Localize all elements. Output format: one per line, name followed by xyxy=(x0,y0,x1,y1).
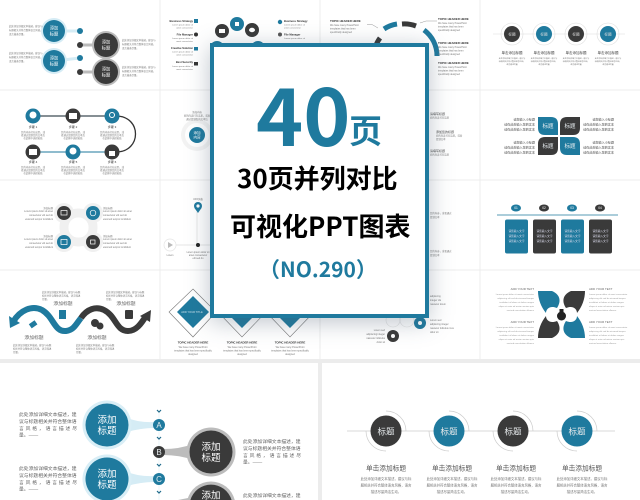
panel: slide 9 donut chart: specifically designed xyxy=(438,73,461,76)
panel: slide 8 diamonds xyxy=(169,289,314,356)
panel: slide 2 step flow: 步骤 1 xyxy=(29,124,38,129)
panel: partial text snippets beside card: nascetur lorem xyxy=(430,303,446,306)
panel: partial text snippets beside card: nascetur ridiculus xyxy=(366,337,386,340)
panel: slide 8 diamonds: designed xyxy=(237,353,248,356)
panel: bottom right slide: 描述尽量简洁生动。 xyxy=(437,489,467,494)
panel: slide 10 four circle titles small: 单击添加标题 xyxy=(502,50,523,55)
panel: slide 12 timeline cards: 请您输入文字 xyxy=(564,239,581,243)
panel: slide 2 step flow: 在此框中选择粘贴 xyxy=(63,136,83,140)
panel: slide 10 four circle titles small: 标题 xyxy=(572,32,580,36)
panel: slide 12 timeline cards: 请您输入文字 xyxy=(508,229,525,233)
panel: slide 5 icon list: amet consectetur xyxy=(176,26,193,30)
panel: bottom right slide: 题相关并符合整体语言风格，语言 xyxy=(557,482,608,488)
panel: slide 7 pin timeline xyxy=(164,197,210,260)
panel: slide 13 clover icon: Lorem ipsum dolor sit amet consectetur xyxy=(496,293,534,296)
panel: slide 10 four circle titles small: 语言描述尽量 xyxy=(538,62,550,66)
panel: slide 5 icon list: File Manager xyxy=(177,32,193,36)
panel: slide 13 clover icon: nostrud exercitation ullamco xyxy=(589,342,617,345)
panel: partial text snippets beside card: 复制文本 xyxy=(436,137,446,141)
panel: slide 1 timeline bubbles: 添加 xyxy=(50,24,58,32)
panel: slide 5 icon list: Lorem ipsum dolor sit xyxy=(172,37,193,40)
panel: slide 10 four circle titles small: 此处添加详细文本描述，建议与 xyxy=(531,56,557,60)
panel: slide 9 donut chart: We have many PowerPoint xyxy=(330,24,359,27)
panel: slide 7 pin timeline: Lorem xyxy=(167,254,173,257)
panel: slide 7 pin timeline: amet consectetur xyxy=(189,254,207,257)
panel: bottom left slide: 此处添加详细文本描述，建 xyxy=(19,411,77,418)
panel: slide 5 icon list: amet consectetur xyxy=(176,54,193,56)
panel: slide 8 diamonds: TOPIC HEADER HERE xyxy=(275,340,305,344)
panel: partial text snippets beside card: 您的内容打在这里 xyxy=(430,152,450,156)
series number: （NO.290） xyxy=(259,254,377,284)
panel: slide 9 donut chart: templates that has been xyxy=(438,50,464,52)
panel: slide 3 four circles: consectetur elit sed do xyxy=(103,214,128,217)
panel: slide 5 icon list: Lorem ipsum dolor sit xyxy=(172,50,193,54)
panel: slide 11 four petals: 标题 xyxy=(564,122,576,130)
panel: bottom left slide: 量。—— xyxy=(19,432,38,438)
panel: slide 9 donut chart: We have many PowerPoint xyxy=(438,66,467,69)
subtitle line 2: 可视化PPT图表 xyxy=(230,207,410,244)
panel: slide 8 diamonds: We have many PowerPoint xyxy=(228,346,257,349)
panel: partial text snippets beside card: Lorem sed xyxy=(430,319,442,322)
panel: slide 13 clover icon: nostrud exercitation ullamco xyxy=(507,309,535,312)
panel: slide 11 four petals xyxy=(504,116,614,155)
panel: bottom right slide: 题相关并符合整体语言风格，语言 xyxy=(427,482,478,488)
panel: bottom left slide: 议与标题相关并符合整体语 xyxy=(243,445,301,452)
panel: partial text snippets beside card: 您的内容，或者通过 xyxy=(430,249,452,253)
panel: slide 12 timeline cards: 请您输入文字 xyxy=(564,229,581,233)
panel: slide 9 donut chart: templates that has been xyxy=(330,28,356,30)
panel: partial text snippets beside card: dolor sit xyxy=(430,331,439,334)
panel: slide 13 clover icon: aliqua ut enim ad minim veniam quis xyxy=(499,338,535,341)
panel: slide 4 wave arrow: 尽量。 xyxy=(42,297,49,301)
panel: slide 4 wave arrow: 添加标题 xyxy=(24,334,44,341)
panel: bottom right slide xyxy=(322,363,640,500)
panel: slide 4 wave arrow: 尽量。 xyxy=(76,350,83,354)
panel: slide 2 step flow: 者通过复制您的文本后 xyxy=(61,133,86,137)
panel: slide 3 four circles: 添加标题 xyxy=(43,234,54,238)
panel: bottom left slide: 添加 xyxy=(97,415,117,426)
panel: bottom right slide: 单击添加标题 xyxy=(432,464,472,472)
panel: slide 1 timeline bubbles: 标题 xyxy=(50,30,59,38)
panel: bottom left slide: 言风格，语言描述尽 xyxy=(19,425,77,432)
panel: slide 2 step flow: 在此框中选择粘贴 xyxy=(102,136,122,140)
panel: slide 4 wave arrow: 相关并符合整体语言风格，语言描述 xyxy=(13,346,52,350)
panel: slide 10 four circle titles small: 标题相关并符合整体语言风格， xyxy=(531,59,557,63)
panel: slide 4 wave arrow: 尽量。 xyxy=(106,297,113,301)
unit 页: 页 xyxy=(349,105,382,153)
panel: bottom left slide: 言风格，语言描述尽 xyxy=(19,479,77,486)
panel: slide 10 four circle titles small: 标题相关并符合整体语言风格， xyxy=(499,59,525,63)
panel: slide 2 step flow: 步骤 5 xyxy=(69,159,78,164)
panel: slide 8 diamonds: We have many PowerPoint xyxy=(179,346,208,349)
panel: slide 4 wave arrow: 尽量。 xyxy=(13,350,20,354)
panel: slide 13 clover icon: nostrud exercitation ullamco xyxy=(589,309,617,312)
panel: slide 12 timeline cards: 请您输入文字 xyxy=(564,234,581,238)
panel: slide 9 donut chart: TOPIC HEADER HERE xyxy=(438,61,469,65)
panel: slide 3 four circles: eiusmod tempor incididunt xyxy=(103,246,131,249)
panel: bottom right slide: 描述尽量简洁生动。 xyxy=(501,489,531,494)
panel: slide 13 clover icon: incididunt ut labore et dolore magna xyxy=(589,301,625,304)
panel: slide 12 timeline cards: 01 xyxy=(514,206,518,210)
panel: slide 11 four petals: 请在此处输入您的文本 xyxy=(504,126,535,132)
panel: bottom left slide: 此处添加详细文本描述，建 xyxy=(243,492,301,499)
panel: slide 12 timeline cards: 04 xyxy=(598,206,602,210)
panel: slide 10 four circle titles small: 标题 xyxy=(604,32,612,36)
panel: slide 12 timeline cards: 请您输入文字 xyxy=(592,234,609,238)
panel: slide 2 step flow: 您的内容打在这里，或 xyxy=(61,130,86,134)
panel: slide 9 donut chart: TOPIC HEADER HERE xyxy=(330,19,361,23)
panel: slide 9 donut chart: TOPIC HEADER HERE xyxy=(438,17,469,21)
panel: slide 2 step flow: 者通过复制您的文本后 xyxy=(100,168,125,172)
panel: partial text snippets beside card: 请填写标题 xyxy=(430,148,445,153)
panel: slide 3 four circles: Lorem ipsum dolor sit amet xyxy=(24,210,53,213)
panel: slide 12 timeline cards: 请您输入文字 xyxy=(536,229,553,233)
panel: slide 1 timeline bubbles xyxy=(9,18,156,86)
panel: slide 4 wave arrow: 此处添加详细文本描述，建议与标题 xyxy=(76,343,115,347)
panel: slide 12 timeline cards: 02 xyxy=(542,206,546,210)
panel: slide 2 step flow: 步骤 2 xyxy=(69,124,78,129)
panel: slide 5 icon list: Lorem ipsum dolor sit xyxy=(284,37,305,40)
panel: bottom left slide: 此处添加详细文本描述，建 xyxy=(19,465,77,472)
panel: slide 2 step flow: 步骤 6 xyxy=(108,159,117,164)
panel: slide 5 icon list: Lorem ipsum dolor sit xyxy=(284,24,305,26)
panel: bottom right slide: 标题 xyxy=(568,426,586,436)
panel: slide 11 four petals: 请在此处输入您的文本 xyxy=(504,150,535,154)
panel: bottom right slide: 单击添加标题 xyxy=(562,464,602,472)
panel: bottom left slide: 言风格，语言描述尽 xyxy=(243,452,301,459)
panel: slide 13 clover icon: nostrud exercitation ullamco xyxy=(507,342,535,345)
panel: slide 1 timeline bubbles: 标题相关并符合整体语言风格， xyxy=(9,28,42,32)
panel: slide 13 clover icon: Lorem ipsum dolor sit amet consectetur xyxy=(589,326,628,329)
panel: slide 1 timeline bubbles: 语言描述尽量。 xyxy=(122,46,139,50)
panel: slide 2 step flow: 者通过复制您的文本后 xyxy=(21,133,46,137)
panel: partial text snippets beside card: 复制文本 xyxy=(430,253,440,257)
panel: slide 10 four circle titles small: 此处添加详细文本描述，建议与 xyxy=(563,56,589,60)
panel: slide 1 timeline bubbles: 此处添加详细文本描述，建议与 xyxy=(9,24,43,28)
panel: slide 3 four circles: Lorem ipsum dolor sit amet xyxy=(103,238,132,241)
panel: slide 3 four circles: Lorem ipsum dolor sit amet xyxy=(103,210,132,213)
panel: bottom left slide: 添加 xyxy=(97,469,117,480)
panel: slide 11 four petals: 标题 xyxy=(542,122,554,130)
panel: slide 6 circle with text: 添加内容 xyxy=(192,110,202,114)
panel: slide 4 wave arrow: 添加标题 xyxy=(116,300,136,307)
panel: slide 7 pin timeline: elit sed do xyxy=(193,257,204,260)
panel: bottom left slide: C xyxy=(156,475,162,484)
panel: slide 1 timeline bubbles: 此处添加详细文本描述，建议与 xyxy=(122,65,156,69)
panel: slide 1 timeline bubbles: 标题相关并符合整体语言风格， xyxy=(122,42,155,46)
panel: slide 8 diamonds: ADD YOUR TITLE xyxy=(181,310,203,314)
panel: bottom right slide: 单击添加标题 xyxy=(496,464,536,472)
big number 40: 40 xyxy=(256,54,350,170)
panel: slide 9 donut chart: templates that has been xyxy=(438,70,464,72)
panel: slide 6 circle with text: 添加 xyxy=(194,130,201,135)
panel: slide 2 step flow: 者通过复制您的文本后 xyxy=(100,133,125,137)
panel: slide 8 diamonds: templates that has been specifically xyxy=(271,350,310,352)
panel: slide 10 four circle titles small: 标题相关并符合整体语言风格， xyxy=(595,59,621,63)
panel: slide 9 donut chart: specifically designed xyxy=(438,53,461,56)
panel: partial text snippets beside card xyxy=(366,111,463,344)
panel: slide 4 wave arrow: 添加标题 xyxy=(53,300,73,307)
panel: slide 9 donut chart xyxy=(330,17,469,76)
panel: bottom right slide: 此处添加详细文本描述，建议与标 xyxy=(557,476,608,481)
panel: partial text snippets beside card: 您的内容，或者通过 xyxy=(430,211,452,215)
panel: slide 9 donut chart: We have many PowerPoint xyxy=(438,22,467,25)
panel: slide 10 four circle titles small: 标题 xyxy=(508,32,516,36)
panel: slide 2 step flow: 在此框中选择粘贴 xyxy=(102,171,122,175)
panel: slide 13 clover icon: adipiscing elit sed do eiusmod tempor xyxy=(497,297,534,300)
panel: slide 1 timeline bubbles: 此处添加详细文本描述，建议与 xyxy=(122,38,156,42)
panel: slide 2 step flow: 步骤 3 xyxy=(108,124,117,129)
panel: bottom left slide: 此处添加详细文本描述，建 xyxy=(243,438,301,445)
panel: bottom left slide: A xyxy=(156,421,162,430)
panel: slide 1 timeline bubbles: 标题相关并符合整体语言风格， xyxy=(122,69,155,73)
panel: slide 3 four circles: eiusmod tempor incididunt xyxy=(25,218,53,221)
panel: slide 1 timeline bubbles: 标题 xyxy=(102,44,111,52)
panel: partial text snippets beside card: Lorem sed xyxy=(374,329,386,332)
panel: slide 12 timeline cards xyxy=(497,204,618,254)
panel: bottom right slide: 描述尽量简洁生动。 xyxy=(371,489,401,494)
panel: slide 12 timeline cards: 请您输入文字 xyxy=(592,239,609,243)
panel: slide 8 diamonds: TOPIC HEADER HERE xyxy=(227,340,257,344)
panel: slide 11 four petals: 请您输入小标题 xyxy=(592,140,614,144)
panel: bottom right slide: 标题 xyxy=(377,426,395,436)
panel: bottom left slide: 标题 xyxy=(201,452,221,464)
panel: slide 9 donut chart: specifically designed xyxy=(330,31,353,34)
panel: slide 12 timeline cards: 03 xyxy=(570,206,574,210)
panel: slide 13 clover icon: incididunt ut labore et dolore magna xyxy=(589,334,625,337)
panel: slide 13 clover icon: Lorem ipsum dolor sit amet consectetur xyxy=(496,326,534,329)
panel: slide 13 clover icon: ADD YOUR TEXT xyxy=(589,287,613,291)
panel: bottom left slide: B xyxy=(156,448,162,457)
panel: bottom right slide: 描述尽量简洁生动。 xyxy=(567,489,597,494)
panel: slide 13 clover icon: ADD YOUR TEXT xyxy=(511,320,534,324)
panel: slide 5 icon list: amet consectetur xyxy=(176,68,193,71)
panel: slide 13 clover icon: aliqua ut enim ad minim veniam quis xyxy=(589,305,625,308)
panel: slide 13 clover icon: Lorem ipsum dolor sit amet consectetur xyxy=(589,293,628,296)
panel: slide 2 step flow: 步骤 4 xyxy=(29,159,38,164)
panel: slide 9 donut chart: We have many PowerPoint xyxy=(438,46,467,49)
panel: slide 5 icon list: amet consectetur xyxy=(176,40,193,43)
panel: slide 5 icon list: Lorem ipsum dolor sit xyxy=(172,24,193,26)
panel: slide 3 four circles: eiusmod tempor incididunt xyxy=(103,218,131,221)
panel: slide 2 step flow: 者通过复制您的文本后 xyxy=(61,168,86,172)
panel: bottom right slide: 标题 xyxy=(504,426,522,436)
panel: central title card xyxy=(210,43,429,318)
panel: bottom left slide: 添加 xyxy=(201,442,221,453)
panel: slide 4 wave arrow: 此处添加详细文本描述，建议与标题 xyxy=(106,290,145,294)
panel: slide 11 four petals: 请您输入小标题 xyxy=(513,140,535,144)
panel: slide 11 four petals: 标题 xyxy=(542,142,554,150)
panel: slide 5 icon list: Business Strategy xyxy=(284,19,308,23)
panel: bottom left slide: 量。—— xyxy=(19,486,38,492)
panel: slide 3 four circles: consectetur elit sed do xyxy=(29,214,54,217)
panel: slide 10 four circle titles small: 语言描述尽量 xyxy=(570,62,582,66)
panel: slide 2 step flow: 您的内容打在这里，或 xyxy=(21,130,46,134)
panel: slide 13 clover icon: incididunt ut labore et dolore magna xyxy=(499,334,535,337)
panel: slide 12 timeline cards: 请您输入文字 xyxy=(536,239,553,243)
panel: slide 13 clover icon: adipiscing elit sed do eiusmod tempor xyxy=(589,330,626,333)
panel: slide 2 step flow: 您的内容打在这里，或 xyxy=(100,130,125,134)
panel: slide 4 wave arrow: 相关并符合整体语言风格，语言描述 xyxy=(106,294,145,298)
panel: slide 1 timeline bubbles: 添加 xyxy=(102,66,110,72)
panel: bottom right slide: 此处添加详细文本描述，建议与标 xyxy=(361,476,412,481)
panel: slide 2 step flow: 您的内容打在这里，或 xyxy=(61,165,86,169)
panel: bottom right slide: 标题 xyxy=(440,426,458,436)
panel: slide 8 diamonds: TOPIC HEADER HERE xyxy=(178,340,208,344)
panel: slide 12 timeline cards: 请您输入文字 xyxy=(536,234,553,238)
panel: slide 10 four circle titles small: 此处添加详细文本描述，建议与 xyxy=(595,56,621,60)
panel: slide 3 four circles: 添加标题 xyxy=(103,234,113,238)
panel: slide 11 four petals: 请您输入小标题 xyxy=(513,116,535,122)
panel: slide 11 four petals: 请您输入小标题 xyxy=(592,116,614,122)
panel: slide 4 wave arrow xyxy=(9,290,151,354)
panel: slide 7 pin timeline: Lorem ipsum dolor sit xyxy=(187,251,210,254)
panel: slide 8 diamonds: templates that has been specifically xyxy=(223,350,262,352)
panel: partial text snippets beside card: dolor sit xyxy=(377,341,385,344)
panel: bottom left slide: 标题 xyxy=(97,479,117,491)
panel: bottom left slide: 量。—— xyxy=(243,458,262,466)
panel: slide 1 timeline bubbles: 添加 xyxy=(50,54,58,62)
panel: slide 2 step flow: 者通过复制您的文本后 xyxy=(21,168,46,172)
panel: slide 6 circle with text: 您的内容打在这里，或者 xyxy=(184,114,211,118)
panel: slide 1 timeline bubbles: 语言描述尽量。 xyxy=(9,32,26,36)
panel: slide 3 four circles: eiusmod tempor incididunt xyxy=(25,246,53,249)
panel: slide 10 four circle titles small xyxy=(493,23,625,66)
panel: bottom right slide: 此处添加详细文本描述，建议与标 xyxy=(491,476,542,481)
panel: partial text snippets beside card: 复制文本 xyxy=(430,215,440,219)
panel: slide 12 timeline cards: 请您输入文字 xyxy=(508,234,525,238)
panel: slide 5 icon list: amet consectetur xyxy=(284,26,301,30)
panel: bottom left slide: 议与标题相关并符合整体语 xyxy=(19,418,77,425)
panel: slide 5 icon list: File Manager xyxy=(284,32,300,36)
panel: slide 5 icon list xyxy=(170,17,308,71)
panel: slide 9 donut chart: templates that has been xyxy=(438,26,464,28)
panel: slide 10 four circle titles small: 语言描述尽量 xyxy=(602,62,614,66)
panel: slide 10 four circle titles small: 单击添加标题 xyxy=(534,50,555,55)
subtitle line 1: 30页并列对比 xyxy=(237,159,398,196)
panel: slide 3 four circles: consectetur elit sed do xyxy=(29,242,54,245)
panel: slide 1 timeline bubbles: 标题 xyxy=(50,60,59,68)
panel: bottom right slide: 题相关并符合整体语言风格，语言 xyxy=(361,482,412,488)
panel: slide 12 timeline cards: 请您输入文字 xyxy=(592,229,609,233)
panel: slide 6 circle with text xyxy=(181,110,213,151)
panel: slide 13 clover icon xyxy=(496,287,628,345)
panel: partial text snippets beside card: adipiscing xyxy=(430,295,441,298)
panel: slide 10 four circle titles small: 单击添加标题 xyxy=(598,50,619,55)
panel: slide 3 four circles: consectetur elit sed do xyxy=(103,242,128,245)
panel: partial text snippets beside card: 添加您的标题 xyxy=(436,129,454,134)
panel: partial text snippets beside card: 请填写标题 xyxy=(430,111,445,116)
panel: slide 12 timeline cards: 请您输入文字 xyxy=(508,239,525,243)
panel: slide 11 four petals: 标题 xyxy=(564,142,576,150)
panel: bottom left slide: 议与标题相关并符合整体语 xyxy=(19,472,77,479)
panel: slide 1 timeline bubbles: 语言描述尽量。 xyxy=(9,59,26,63)
panel: slide 3 four circles: 添加标题 xyxy=(103,206,113,210)
panel: slide 7 pin timeline: UFO风格 xyxy=(193,197,204,201)
panel: slide 4 wave arrow: 相关并符合整体语言风格，语言描述 xyxy=(42,294,81,298)
panel: slide 5 icon list: Business Strategy xyxy=(170,19,194,23)
panel: slide 8 diamonds: designed xyxy=(188,353,199,356)
panel: slide 2 step flow: 在此框中选择粘贴 xyxy=(63,171,83,175)
panel: slide 13 clover icon: aliqua ut enim ad minim veniam quis xyxy=(589,338,625,341)
panel: slide 3 four circles xyxy=(24,203,132,252)
panel: slide 4 wave arrow: 相关并符合整体语言风格，语言描述 xyxy=(76,346,115,350)
panel: slide 1 timeline bubbles: 此处添加详细文本描述，建议与 xyxy=(9,51,43,55)
panel: slide 2 step flow: 您的内容打在这里，或 xyxy=(21,165,46,169)
panel: slide 2 step flow: 您的内容打在这里，或 xyxy=(100,165,125,169)
panel: slide 1 timeline bubbles: 标题相关并符合整体语言风格， xyxy=(9,55,42,59)
panel: slide 13 clover icon: incididunt ut labore et dolore magna xyxy=(499,301,535,304)
panel: slide 2 step flow: 在此框中选择粘贴 xyxy=(23,136,43,140)
panel: slide 5 icon list: Creative Solution xyxy=(171,46,193,50)
panel: slide 9 donut chart: TOPIC HEADER HERE xyxy=(438,41,469,45)
panel: slide 10 four circle titles small: 语言描述尽量 xyxy=(506,62,518,66)
panel: slide 9 donut chart: specifically designed xyxy=(438,29,461,32)
panel: slide 13 clover icon: ADD YOUR TEXT xyxy=(589,320,613,324)
panel: slide 11 four petals: 请在此处输入您的文本 xyxy=(504,122,535,126)
panel: slide 13 clover icon: aliqua ut enim ad minim veniam quis xyxy=(499,305,535,308)
panel: slide 4 wave arrow: 此处添加详细文本描述，建议与标题 xyxy=(42,290,81,294)
panel: partial text snippets beside card: 您的内容打在这里，或者 xyxy=(436,134,463,138)
panel: bottom left slide: 标题 xyxy=(97,425,117,437)
panel: slide 2 step flow: 在此框中选择粘贴 xyxy=(23,171,43,175)
panel: slide 3 four circles: 添加标题 xyxy=(43,206,54,210)
panel: partial text snippets beside card: nascetur ridiculus mus xyxy=(430,327,455,330)
panel: slide 10 four circle titles small: 单击添加标题 xyxy=(566,50,587,55)
panel: slide 10 four circle titles small: 标题 xyxy=(540,32,548,36)
panel: bottom left slide xyxy=(0,363,318,500)
panel: slide 11 four petals: 请在此处输入您的文本 xyxy=(504,144,535,150)
panel: slide 3 four circles: Lorem ipsum dolor sit amet xyxy=(24,238,53,241)
panel: slide 2 step flow xyxy=(21,108,136,175)
panel: slide 13 clover icon: adipiscing elit sed do eiusmod tempor xyxy=(589,297,626,300)
panel: slide 4 wave arrow: 此处添加详细文本描述，建议与标题 xyxy=(13,343,52,347)
panel: bottom right slide: 此处添加详细文本描述，建议与标 xyxy=(427,476,478,481)
panel: slide 8 diamonds: We have many PowerPoint xyxy=(276,346,305,349)
panel: bottom right slide: 题相关并符合整体语言风格，语言 xyxy=(491,482,542,488)
panel: partial text snippets beside card: 您的内容打在这里 xyxy=(430,116,450,120)
panel: slide 13 clover icon: ADD YOUR TEXT xyxy=(511,287,534,291)
panel: slide 11 four petals: 请在此处输入您的文本 xyxy=(583,144,614,150)
panel: slide 11 four petals: 请在此处输入您的文本 xyxy=(583,126,614,132)
panel: slide 1 timeline bubbles: 标题 xyxy=(102,72,111,78)
panel: slide 4 wave arrow: 添加标题 xyxy=(87,334,107,341)
panel: slide 11 four petals: 请在此处输入您的文本 xyxy=(583,122,614,126)
panel: partial text snippets beside card: adipiscing integer xyxy=(366,333,385,336)
panel: slide 11 four petals: 请在此处输入您的文本 xyxy=(583,150,614,154)
panel: slide 5 icon list: Lorem ipsum dolor sit xyxy=(172,65,193,68)
panel: slide 10 four circle titles small: 此处添加详细文本描述，建议与 xyxy=(499,56,525,60)
panel: slide 5 icon list: Best Security xyxy=(176,60,193,64)
panel: slide 6 circle with text: 内容 xyxy=(194,134,201,140)
panel: partial text snippets beside card: adipiscing integer xyxy=(430,323,449,326)
panel: slide 8 diamonds: templates that has been specifically xyxy=(174,350,213,352)
panel: slide 13 clover icon: adipiscing elit sed do eiusmod tempor xyxy=(497,330,534,333)
panel: slide 10 four circle titles small: 标题相关并符合整体语言风格， xyxy=(563,59,589,63)
panel: slide 1 timeline bubbles: 添加 xyxy=(102,38,110,46)
panel: slide 6 circle with text: 通过复制您的文本后 xyxy=(186,117,208,121)
panel: bottom right slide: 单击添加标题 xyxy=(366,464,406,472)
panel: slide 8 diamonds: designed xyxy=(285,353,296,356)
panel: slide 1 timeline bubbles: 语言描述尽量。 xyxy=(122,73,139,77)
panel: partial text snippets beside card: integer dis xyxy=(430,299,442,302)
